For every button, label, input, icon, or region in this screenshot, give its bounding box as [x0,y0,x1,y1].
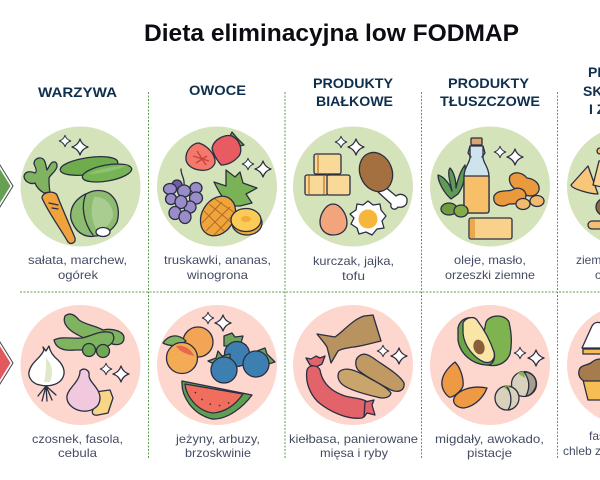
icon: butter [469,218,512,239]
icon: muffin [579,359,600,400]
label: produkty tłuszczowe: pistacje [467,446,512,460]
panel: produkty skrobiowe high FODMAP [563,305,600,458]
circle background [293,305,413,425]
label: produkty tłuszczowe [435,432,544,460]
icon: chicken drumstick [354,147,407,209]
icon: cake [582,322,600,354]
label: owoce [175,432,260,460]
icon: rosemary [438,165,465,199]
icon: blackberries [208,333,275,383]
label: owoce: truskawki, ananas, [164,253,271,267]
icon: crisps and nuts [571,148,600,229]
heading: produkty białkowe: PRODUKTY [313,75,394,91]
circle background [567,305,600,425]
marker: allowed foods [0,157,13,215]
heading: produkty tłuszczowe: PRODUKTY [448,75,530,91]
icon: sparkles [514,347,544,366]
label: warzywa [32,432,123,460]
heading: warzywa: WARZYWA [38,84,117,100]
panel: warzywa high FODMAP [20,305,140,460]
icon: sparkles [59,135,88,155]
panel: produkty białkowe high FODMAP [289,305,418,460]
panel: owoce high FODMAP [157,305,277,460]
icon: pistachios [495,371,536,410]
label: produkty białkowe: mięsa i ryby [320,446,388,460]
icon: strawberries [186,132,244,170]
label: produkty tłuszczowe [445,253,535,282]
icon: sparkles [377,345,407,364]
panel: produkty białkowe low FODMAP [293,75,413,283]
icon: sparkles [494,146,523,165]
icon: sparkles [242,158,271,177]
circle background [430,126,550,246]
label: produkty tłuszczowe: orzeszki ziemne [445,268,535,282]
icon: fish [317,315,381,363]
circle background [20,305,140,425]
icon: fried egg [350,201,386,235]
icon: almonds [442,362,487,408]
label: warzywa: cebula [58,446,97,460]
panel: warzywa low FODMAP [20,84,140,282]
label: produkty białkowe: tofu [342,269,365,283]
icon: olives [441,203,468,217]
label: produkty tłuszczowe: migdały, awokado, [435,432,544,446]
icon: onion [29,346,64,401]
label: produkty tłuszczowe: oleje, masło, [454,253,526,267]
label: produkty białkowe [289,432,418,460]
title: Dieta eliminacyjna low FODMAP [144,20,519,47]
panel: produkty tłuszczowe low FODMAP [430,75,550,282]
label: produkty białkowe: kurczak, jajka, [313,254,394,268]
icon: avocado [458,316,511,366]
circle background [567,126,600,246]
label: warzywa: czosnek, fasola, [32,432,123,446]
label: owoce: jeżyny, arbuzy, [175,432,260,446]
marker: foods to avoid [0,334,13,392]
panel: owoce low FODMAP [157,82,277,282]
icon: breaded pieces [338,354,404,398]
label: produkty białkowe [313,254,394,283]
label: warzywa: sałata, marchew, [28,253,127,267]
label: owoce: brzoskwinie [185,446,251,460]
label: warzywa [28,253,127,282]
label: produkty skrobiowe [563,429,600,458]
heading: produkty skrobiowe [583,64,600,117]
icon: sparkles [202,312,231,331]
icon: sparkles [100,363,129,382]
icon: garlic [67,369,113,415]
icon: pineapple [193,170,262,242]
label: owoce: winogrona [186,268,248,282]
icon: sausage [306,356,375,418]
icon: watermelon [182,381,252,419]
icon: lettuce [71,191,118,236]
heading: owoce: OWOCE [189,82,246,98]
label: produkty skrobiowe [576,253,600,282]
icon: peanuts [494,173,544,210]
panel: produkty tłuszczowe high FODMAP [430,305,550,460]
circle background [157,305,277,425]
icon: egg [320,204,347,235]
heading: produkty białkowe [313,75,394,109]
icon: tofu [305,154,350,195]
icon: olive oil bottle [464,138,489,213]
icon: grapes [164,169,202,224]
heading: produkty tłuszczowe [440,75,540,109]
label: warzywa: ogórek [58,268,99,282]
icon: sparkles [335,136,364,155]
heading: produkty tłuszczowe: TŁUSZCZOWE [440,93,540,109]
icon: beans [54,314,124,358]
icon: cucumbers [59,154,133,185]
heading: produkty białkowe: BIAŁKOWE [316,93,393,109]
circle background [430,305,550,425]
label: produkty białkowe: kiełbasa, panierowane [289,432,418,446]
icon: carrot [24,158,75,243]
circle background [293,126,413,246]
circle background [157,126,277,246]
label: owoce [164,253,271,282]
circle background [20,126,140,246]
icon: peaches [163,327,213,374]
panel: produkty skrobiowe low FODMAP [567,64,600,282]
